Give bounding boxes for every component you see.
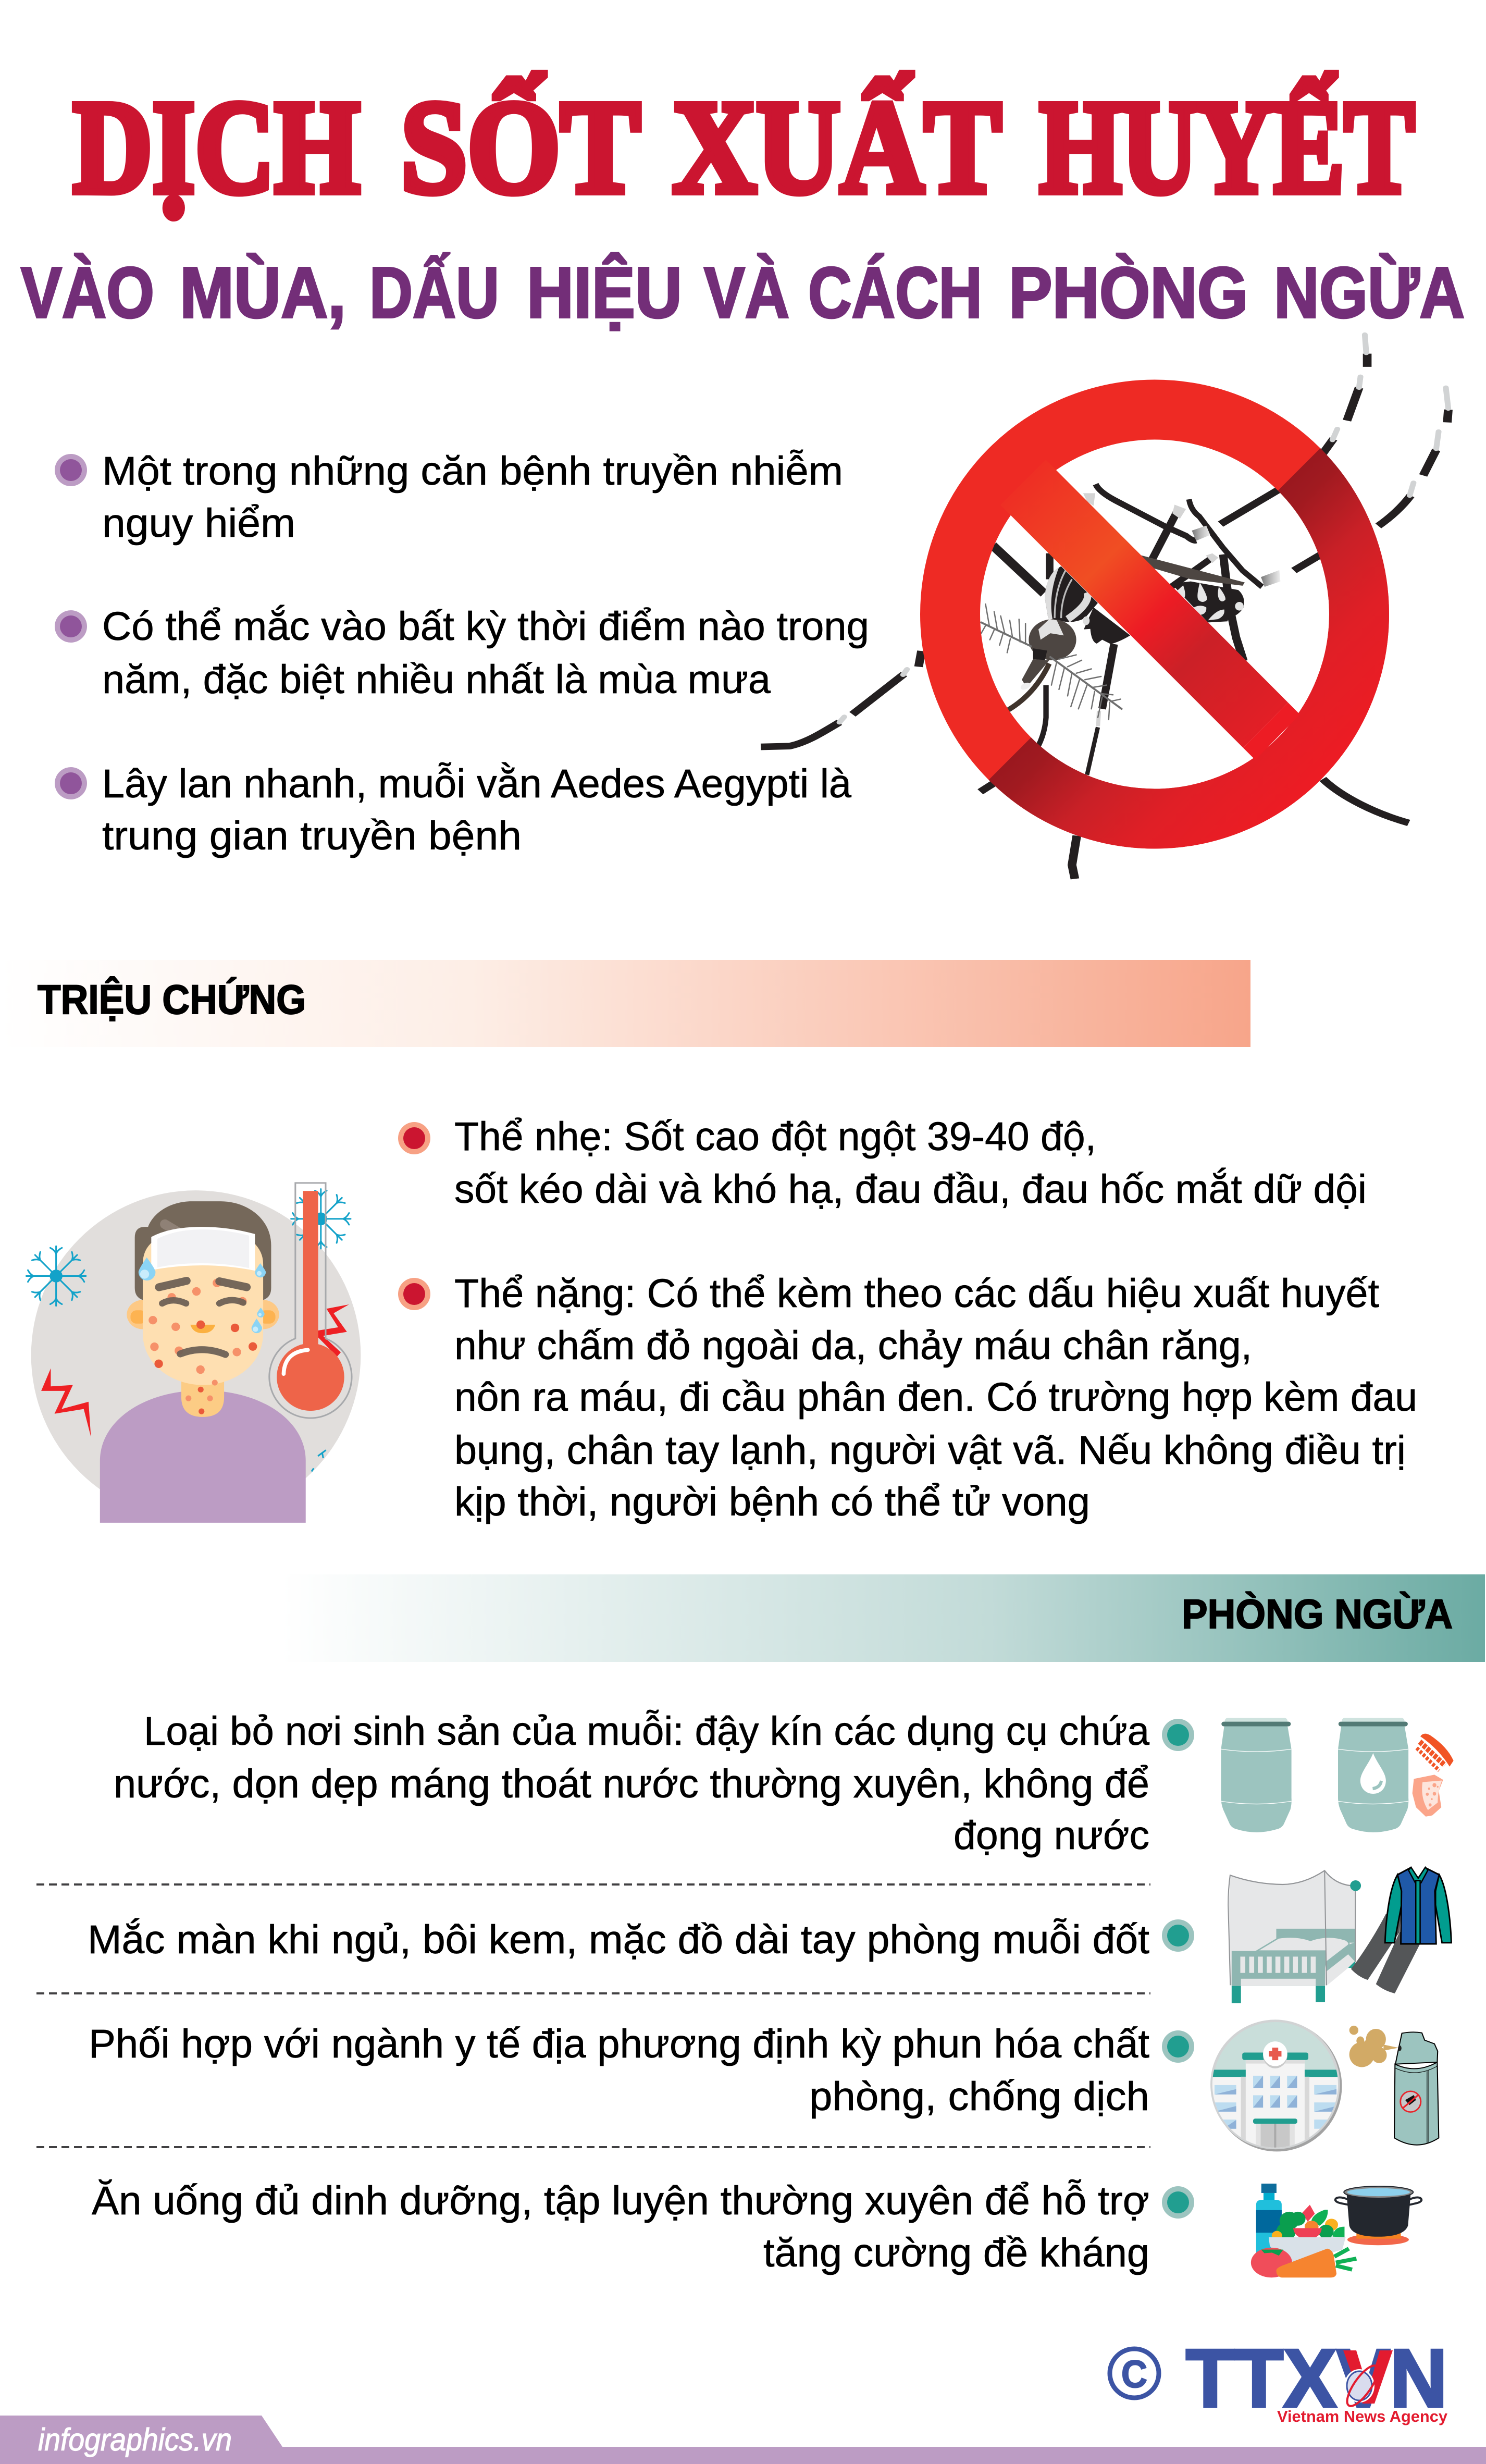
mosquito body: [981, 484, 1280, 775]
text: prevention 3: Phối hợp với ngành y tế địa phương định kỳ phun hóa chất: [89, 2022, 1149, 2066]
icon: snowflake right: [291, 1189, 351, 1249]
subtitle: PHÒNG: [1009, 253, 1248, 333]
text: prevention 4: [92, 2178, 1149, 2275]
logo: copyright symbol: C: [1121, 2352, 1147, 2396]
icon: long clothes: [1351, 1867, 1451, 1993]
footer band: [0, 2416, 1486, 2464]
text: prevention 1: nước, dọn dẹp máng thoát nước thường xuyên, không để: [114, 1761, 1149, 1806]
intro text 3: trung gian truyền bệnh: [102, 814, 522, 858]
icon: insect spray: [1349, 2026, 1439, 2145]
text: severe symptoms: như chấm đỏ ngoài da, chảy máu chân răng,: [454, 1323, 1252, 1368]
head: [1029, 619, 1076, 660]
icon: thermometer: [269, 1183, 352, 1418]
sweat drops: [139, 1258, 266, 1333]
text: prevention 1: Loại bỏ nơi sinh sản của muỗi: đậy kín các dụng cụ chứa: [144, 1709, 1149, 1754]
text: prevention 3: phòng, chống dịch: [809, 2074, 1149, 2119]
subtitle: VÀO: [21, 253, 154, 333]
text: prevention 1: đọng nước: [953, 1813, 1149, 1858]
bullet: [1162, 1719, 1194, 1751]
icon: sponge: [1413, 1775, 1443, 1817]
person head: [127, 1201, 279, 1417]
intro text 1: nguy hiểm: [102, 501, 295, 546]
text: prevention 2: Mắc màn khi ngủ, bôi kem, mặc đồ dài tay phòng muỗi đốt: [88, 1917, 1149, 1962]
intro text 2: năm, đặc biệt nhiều nhất là mùa mưa: [102, 657, 771, 702]
thorax: [1045, 566, 1098, 622]
text: prevention 4: tăng cường đề kháng: [763, 2231, 1149, 2275]
subtitle: DẤU: [369, 253, 499, 333]
intro bullet list: [55, 449, 869, 858]
icon: barrel with water drop: [1338, 1718, 1408, 1832]
subtitle: HIỆU: [527, 253, 682, 333]
icon: lightning left: [41, 1369, 91, 1437]
intro text 2: Có thể mắc vào bất kỳ thời điểm nào trong: [102, 604, 869, 649]
bullet: [1162, 1919, 1194, 1952]
subtitle: MÙA,: [180, 253, 346, 333]
subtitle: CÁCH: [808, 253, 982, 333]
gray leg tips: [1192, 526, 1280, 587]
icon: boiling pot: [1335, 2186, 1421, 2245]
illustration: sick person with fever: [27, 1183, 361, 1523]
prevention list: [36, 1709, 1194, 2275]
logo: copyright symbol: [1110, 2349, 1159, 2398]
illustration: mosquito: [761, 335, 1448, 879]
section header: phòng ngừa: PHÒNG NGỪA: [1182, 1591, 1453, 1637]
icon: hospital: [1209, 2021, 1342, 2151]
mosquito outer legs: [761, 335, 1448, 879]
bullet 2: [55, 610, 87, 643]
wing: [1140, 555, 1245, 586]
icon: bed with mosquito net: [1228, 1870, 1361, 2003]
text: prevention 3: [89, 2022, 1149, 2119]
icons: barrels, brush, sponge, bed net, clothes: [1221, 1718, 1454, 2003]
text: severe symptoms: bụng, chân tay lạnh, người vật vã. Nếu không điều trị: [454, 1428, 1406, 1473]
bullet: [1162, 2030, 1194, 2063]
title: XUẤT: [673, 73, 1001, 221]
intro text 3: [102, 761, 851, 858]
text: severe symptoms: kịp thời, người bệnh có thể tử vong: [454, 1480, 1090, 1524]
icon: brush: [1417, 1734, 1454, 1770]
section header: triệu chứng: [0, 960, 1250, 1047]
intro text 1: Một trong những căn bệnh truyền nhiễm: [102, 449, 843, 494]
intro text 1: [102, 449, 843, 546]
text: prevention 4: Ăn uống đủ dinh dưỡng, tập luyện thường xuyên để hỗ trợ: [92, 2178, 1149, 2223]
bullet: mild: [398, 1122, 430, 1154]
section header: phòng ngừa: [281, 1574, 1485, 1662]
headband: [151, 1227, 255, 1271]
symptom list: [398, 1114, 1417, 1524]
section header: triệu chứng: TRIỆU CHỨNG: [38, 976, 306, 1022]
text: prevention 1: [114, 1709, 1149, 1858]
icon: lightning right: [318, 1304, 349, 1357]
person body: [100, 1390, 306, 1523]
text: severe symptoms: nôn ra máu, đi cầu phân đen. Có trường hợp kèm đau: [454, 1375, 1417, 1420]
intro text 2: [102, 604, 869, 702]
icon: snowflake left: [27, 1246, 86, 1306]
subtitle: VÀ: [704, 253, 789, 333]
title: DỊCH: [73, 74, 360, 221]
text: mild symptoms: [454, 1114, 1367, 1212]
subtitle: [21, 253, 1465, 333]
footer band: infographics.vn: [38, 2422, 232, 2457]
icon: prohibition sign: [950, 410, 1359, 819]
title: SỐT: [401, 73, 640, 221]
bullet 1: [55, 454, 87, 486]
text: mild symptoms: Thể nhẹ: Sốt cao đột ngột 39-40 độ,: [454, 1114, 1096, 1159]
bullet: severe: [398, 1278, 430, 1310]
text: severe symptoms: Thể nặng: Có thể kèm theo các dấu hiệu xuất huyết: [454, 1271, 1379, 1316]
title: [73, 73, 1415, 221]
abdomen: [1171, 582, 1244, 622]
intro text 3: Lây lan nhanh, muỗi vằn Aedes Aegypti là: [102, 761, 851, 806]
antennae: [981, 604, 1122, 720]
icon: food bowl and water: [1251, 2184, 1356, 2277]
bullet: [1162, 2186, 1194, 2219]
bullet 3: [55, 767, 87, 799]
icons: hospital, spray, food, pot: [1209, 2021, 1439, 2277]
text: severe symptoms: [454, 1271, 1417, 1524]
icon: barrel empty: [1221, 1718, 1292, 1832]
logo: TTXVN: Vietnam News Agency: [1277, 2407, 1448, 2425]
logo: TTXVN: TTXVN: [1186, 2333, 1447, 2424]
text: mild symptoms: sốt kéo dài và khó hạ, đau đầu, đau hốc mắt dữ dội: [454, 1167, 1367, 1212]
